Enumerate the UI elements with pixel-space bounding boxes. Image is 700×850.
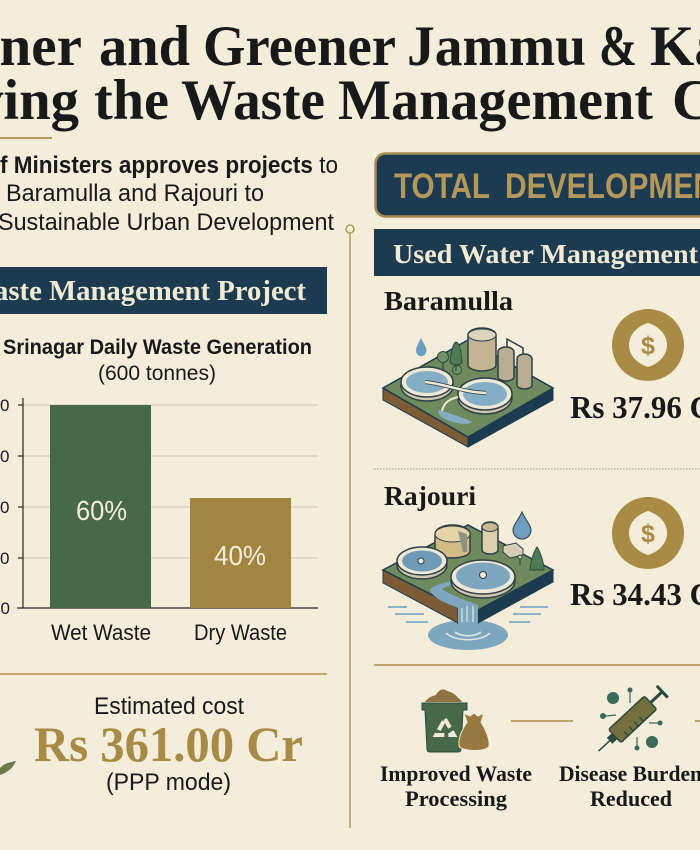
drop [416,338,426,356]
icon: Baramulla cost badge [612,309,684,381]
bar chart: daily waste: Wet Waste [51,620,151,645]
title: Greener [203,15,396,78]
banner: waste management project [0,267,327,314]
subtitle text block [0,152,338,236]
bar chart: daily waste [0,396,318,645]
subtitle text block: f Ministers approves projects to [0,152,338,179]
icon: Baramulla cost badge: $ [641,332,655,360]
banner: used water management: Used Water Management [393,239,698,269]
trees [438,352,448,362]
drop [513,512,531,539]
label: improved waste processing: Improved Waste [380,761,532,786]
chart title: Srinagar Daily Waste Generation [3,336,312,359]
title: & [599,15,637,78]
title: Jammu [407,15,586,78]
tanks [435,525,470,558]
title [0,15,700,132]
estimated cost block: Rs 361.00 Cr [34,716,303,772]
icon: Rajouri treatment plant [383,512,553,650]
icon: Rajouri cost badge: $ [641,520,655,548]
banner: used water management [374,229,700,276]
estimated cost block: (PPP mode) [106,769,231,796]
label: improved waste processing: Processing [405,786,507,811]
bar chart: daily waste: Dry Waste [194,620,287,645]
banner: total development: TOTAL [394,167,490,206]
estimated cost block: Estimated cost [94,693,244,720]
banner: waste management project: aste Management Project [0,276,307,307]
icon: leaf [0,761,16,775]
bar: dry waste: 40% [214,540,266,571]
label: improved waste processing [380,761,532,811]
chart title: (600 tonnes) [98,362,216,385]
bar: wet waste [50,405,151,608]
estimated cost block [34,693,303,796]
basins [401,371,453,401]
label: disease burden reduced [559,761,700,811]
heading: Baramulla: Baramulla [384,286,514,316]
title: the [94,69,169,132]
icon: syringe and germs [592,685,668,758]
title: Waste [181,69,325,132]
chart title [3,336,312,385]
title: and [99,15,190,78]
heading: Rajouri: Rajouri [384,481,477,511]
basins [397,551,447,579]
subtitle text block: Sustainable Urban Development [0,209,334,236]
bar: dry waste [190,498,291,608]
banner: total development [376,154,700,216]
column divider [346,225,354,828]
icon: Rajouri cost badge [612,497,684,569]
subtitle text block: Baramulla and Rajouri to [6,180,264,207]
title: Management [338,69,653,132]
icon: Baramulla treatment plant [383,328,553,447]
bar: wet waste: 60% [76,495,127,526]
tanks [507,339,523,355]
label: disease burden reduced: Reduced [590,786,672,811]
icon: waste bin and bag [422,689,489,752]
bar chart: daily waste: 0 [1,599,10,618]
